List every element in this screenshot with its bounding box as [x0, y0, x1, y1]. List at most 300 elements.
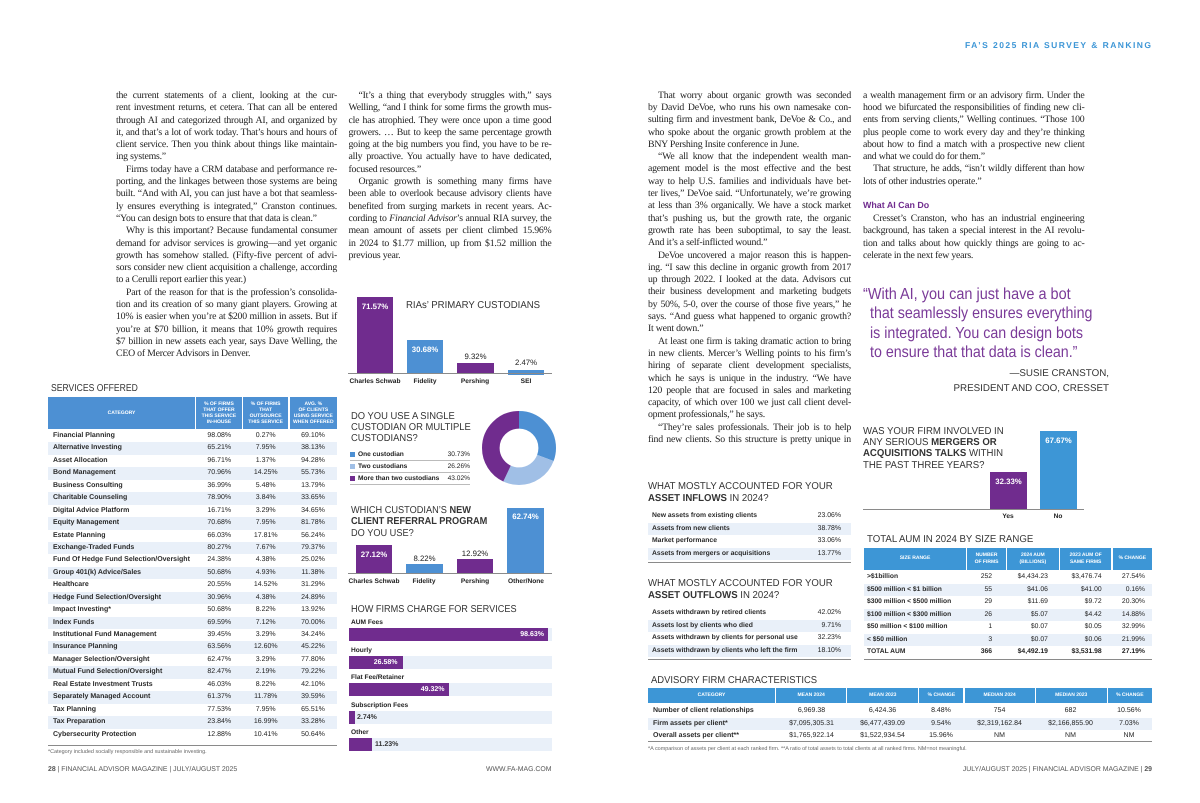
total AUM table rows: $0.05 [1085, 623, 1102, 630]
services table rows: 16.99% [254, 718, 278, 725]
total AUM table header: SAME FIRMS [1070, 558, 1101, 564]
article column 4 top [863, 90, 1085, 187]
article column 4 top: lots of other industries operate.” [863, 176, 981, 187]
article column 1: $7 billion in new assets each year, says Dave Welling, the [116, 336, 337, 347]
total AUM table rows: $3,476.74 [1071, 573, 1102, 580]
services table rows: 69.10% [301, 432, 325, 439]
pull quote attribution [953, 368, 1109, 394]
bar: Fidelity [406, 564, 443, 573]
bar: no [1040, 430, 1077, 509]
total AUM table header: SIZE RANGE [900, 555, 930, 561]
services table rows: 3.84% [256, 494, 276, 501]
article column 2: cording to Financial Advisor’s annual RIA survey, the [348, 213, 552, 224]
services table rows: 3.29% [256, 656, 276, 663]
article column 4 bottom: celerate in the next few years. [863, 250, 973, 261]
total AUM table rows: $100 million < $300 million [867, 611, 951, 618]
services table rows: 24.89% [301, 594, 325, 601]
services table rows: 14.52% [254, 581, 278, 588]
total AUM table rows: $11.69 [1028, 598, 1048, 605]
services table rows: 30.96% [207, 594, 231, 601]
services table rows: 36.99% [207, 482, 231, 489]
heading: referral program [351, 505, 487, 539]
article column 3: ing. “I saw this decline in organic growth from 2017 [648, 262, 851, 273]
article column 3: agement model is the most effective and the best [648, 163, 851, 174]
services table rows: 0.27% [256, 432, 276, 439]
services table header: OUTSOURCE [250, 413, 282, 419]
services table rows: 3.29% [256, 631, 276, 638]
article column 3: BNY Pershing Insite conference in June. [648, 139, 799, 150]
table: asset outflows: Assets lost by clients who died [652, 622, 753, 628]
heading: single or multiple [351, 411, 471, 444]
advisory table rows: 7.03% [1119, 720, 1139, 727]
heading: mergers and acquisitions: ACQUISITIONS TALKS WITHIN [863, 448, 1003, 459]
total AUM table rows: 27.54% [1122, 573, 1145, 580]
article column 1: ly ensures everything is integrated,” Cranston continues. [116, 201, 337, 212]
article column 1: client service. Then you think about things like maintain- [116, 139, 337, 150]
services table rows: 50.68% [207, 606, 231, 613]
page footer right: JULY/AUGUST 2025 | FINANCIAL ADVISOR MAGAZINE | 29 [963, 766, 1152, 773]
article column 1: “You can design bots to ensure that that data is clean.” [116, 213, 317, 224]
heading: mergers and acquisitions: ANY SERIOUS MERGERS OR [863, 437, 997, 448]
advisory table rows: 6,969.38 [798, 707, 825, 714]
article column 1: through AI and categorized through AI, and organized by [116, 115, 337, 126]
total AUM table rows: $9.72 [1085, 598, 1102, 605]
label: other: Other [351, 729, 369, 736]
heading: asset inflows [648, 481, 833, 504]
services table rows: 5.48% [256, 482, 276, 489]
legend: more than two: More than two custodians [358, 474, 439, 482]
total AUM table rows: $0.06 [1085, 636, 1102, 643]
services table rows: Institutional Fund Management [53, 631, 156, 638]
chart: RIAs primary custodians: 2.47% [515, 358, 537, 367]
services table rows: 50.68% [207, 569, 231, 576]
article column 2: Welling, “and I think for some firms the growth mus- [348, 102, 552, 113]
services table rows: 65.51% [301, 706, 325, 713]
article column 1: demand for advisor services is growing—and yet organic [116, 238, 337, 249]
article column 2: focused resources.” [348, 164, 421, 175]
article column 3: who spoke about the organic growth problem at the [648, 127, 851, 138]
article column 3: by 50%, 5-0, over the course of those five years,” he [648, 299, 851, 310]
advisory table header: MEAN 2023 [869, 692, 896, 698]
total AUM table rows: $5.07 [1031, 611, 1048, 618]
total AUM table rows: $4,434.23 [1018, 573, 1048, 580]
services table rows: 20.55% [207, 581, 231, 588]
article column 1: built. “And with AI, you can just have a bot that seamless- [116, 188, 337, 199]
services table rows: Digital Advice Platform [53, 507, 129, 514]
services table rows: 11.78% [254, 693, 277, 700]
article column 3: find new clients. So this structure is pretty unique in [648, 434, 851, 445]
services table header: % OF FIRMS [204, 401, 234, 407]
article column 1: CEO of Mercer Advisors in Denver. [116, 348, 250, 359]
article column 4 top: and what we could do for them.” [863, 151, 985, 162]
advisory table rows: Firm assets per client* [653, 720, 728, 727]
services table rows: Mutual Fund Selection/Oversight [53, 668, 162, 675]
advisory table rows: 8.48% [931, 707, 951, 714]
heading: services offered: SERVICES OFFERED [51, 383, 138, 394]
article column 2: Organic growth is something many firms have [358, 176, 552, 187]
total AUM table rows: >$1billion [867, 573, 898, 580]
services table rows: 66.03% [207, 532, 231, 538]
services table rows: 78.90% [207, 494, 231, 501]
heading: single or multiple: CUSTODIANS? [351, 433, 418, 444]
services table rows: 46.03% [207, 681, 231, 688]
total AUM table rows: 366 [981, 648, 992, 655]
table: asset outflows: Assets withdrawn by clients who left the firm [652, 646, 797, 654]
label: flat fee: Flat Fee/Retainer [351, 674, 404, 681]
advisory table rows: $6,477,439.09 [860, 720, 905, 727]
article column 3: says. “And guess what happened to organic growth? [648, 311, 851, 322]
total AUM table rows: 14.88% [1122, 611, 1145, 618]
total AUM table rows: 20.30% [1122, 598, 1145, 605]
panel: single or multiple custodians [350, 411, 471, 485]
article column 3: It went down.” [648, 323, 703, 334]
pull quote: is integrated. You can design bots [870, 325, 1083, 342]
services table rows: 24.38% [207, 556, 231, 563]
chart: referral program [348, 505, 552, 585]
advisory table rows: 10.56% [1117, 707, 1141, 714]
page footer left: 28 | FINANCIAL ADVISOR MAGAZINE | JULY/AUGUST 2025 [48, 766, 237, 773]
advisory table rows: $2,166,855.90 [1048, 720, 1093, 727]
heading: referral program: CLIENT REFERRAL PROGRAM [351, 516, 487, 527]
advisory table rows: 9.54% [931, 720, 951, 727]
advisory table rows: 754 [994, 707, 1005, 714]
total AUM table header [864, 548, 1152, 570]
table: asset inflows: 38.78% [818, 525, 841, 532]
label: hourly: Hourly [351, 647, 372, 654]
bar: Other/None [507, 508, 544, 573]
total AUM table rows: $0.07 [1031, 636, 1048, 643]
services table rows: 61.37% [207, 693, 231, 700]
article column 3: “They’re sales professionals. Their job is to help [658, 422, 851, 433]
advisory table rows: $7,095,305.31 [789, 720, 834, 727]
article column 3: which he says is unique in the industry. “We have [648, 373, 851, 384]
services table header: IN-HOUSE [207, 419, 231, 425]
bar: Charles Schwab [356, 545, 392, 573]
services table rows: 12.60% [254, 643, 278, 650]
services table header: AVG. % [304, 401, 322, 407]
total AUM table rows: $500 million < $1 billion [867, 586, 942, 593]
heading: referral program: DO YOU USE? [351, 528, 414, 539]
bar: Charles Schwab: 27.12% [361, 550, 387, 559]
bar: no: 67.67% [1045, 436, 1072, 444]
services table rows: 45.22% [301, 643, 325, 650]
heading: single or multiple: CUSTODIAN OR MULTIPLE [351, 422, 471, 433]
bar: Fidelity: 30.68% [412, 345, 438, 354]
article column 3: opment professionals,” he says. [648, 409, 765, 420]
services table rows: 96.71% [207, 457, 231, 464]
chart: mergers and acquisitions: No [1054, 513, 1062, 520]
total AUM table rows: TOTAL AUM [867, 648, 905, 655]
services table rows: Exchange-Traded Funds [53, 544, 134, 551]
article column 2: going at the big numbers you find, you have to be re- [348, 139, 552, 150]
table: asset outflows: Assets withdrawn by retired clients [652, 609, 766, 616]
article column 1: Why is this important? Because fundamental consumer [126, 225, 337, 236]
services table rows: 25.02% [301, 556, 325, 563]
services table rows: 70.96% [207, 469, 231, 476]
services table rows: 81.78% [301, 519, 325, 526]
bar: Charles Schwab: 71.57% [362, 302, 388, 311]
total AUM table header: 2024 AUM [1021, 552, 1045, 558]
chart: RIAs primary custodians: Pershing [461, 378, 489, 385]
article column 2: previous year. [348, 250, 400, 261]
article column 3: “We all know that the independent wealth man- [658, 151, 851, 162]
pull quote attribution: PRESIDENT AND COO, CRESSET [953, 383, 1109, 394]
article column 3: sulting firm and investment bank, DeVoe & Co., and [648, 114, 851, 125]
services table rows: Asset Allocation [53, 457, 108, 464]
heading: mergers and acquisitions [863, 426, 1004, 471]
heading: mergers and acquisitions: WAS YOUR FIRM INVOLVED IN [863, 426, 1004, 437]
services table rows: Equity Management [53, 519, 119, 526]
chart: RIAs primary custodians: Charles Schwab [350, 378, 400, 385]
advisory table rows: Overall assets per client** [653, 732, 739, 739]
advisory table header: MEAN 2024 [798, 692, 825, 698]
services table header: WHEN OFFERED [293, 419, 334, 425]
advisory table rows: NM [1065, 732, 1076, 739]
services table header: USING SERVICE [294, 413, 333, 419]
article column 4 top: a wealth management firm or an advisory firm. Under the [863, 90, 1084, 101]
article column 3: ter lives,” DeVoe said. “Unfortunately, we’re growing [648, 188, 851, 199]
total AUM table rows: 252 [981, 573, 992, 580]
heading: asset outflows: ASSET OUTFLOWS IN 2024? [648, 590, 779, 601]
services table rows: 33.65% [301, 494, 325, 501]
article column 1: porting, and the linkages between those systems are being [116, 176, 337, 187]
services table rows: 4.93% [256, 569, 276, 576]
chart: referral program: Other/None [508, 578, 544, 585]
article column 2 [348, 90, 552, 261]
heading: single or multiple: DO YOU USE A SINGLE [351, 411, 455, 422]
services table header [48, 397, 337, 429]
bar: yes: 32.33% [995, 477, 1022, 486]
services table rows: 2.19% [256, 668, 276, 675]
chart: mergers and acquisitions: Yes [1002, 513, 1014, 520]
services table rows: 79.37% [301, 544, 325, 551]
table: asset outflows [648, 609, 851, 657]
article column 1: growth has somehow stalled. (Fifty-five percent of advi- [116, 250, 337, 261]
total AUM table rows: $300 million < $500 million [867, 598, 951, 605]
subheading: What AI Can Do: What AI Can Do [863, 200, 929, 210]
services table rows: Real Estate Investment Trusts [53, 681, 153, 688]
bar: AUM fees [349, 628, 552, 641]
services table rows: 4.38% [256, 594, 276, 601]
article column 2: cle has atrophied. They were once upon a time good [348, 115, 552, 126]
heading: referral program: WHICH CUSTODIAN’S NEW [351, 505, 471, 516]
services table rows: 23.84% [207, 718, 231, 725]
table: asset outflows: Assets withdrawn by clients for personal use [652, 634, 798, 641]
label: subscription: Subscription Fees [351, 702, 408, 709]
services table rows: 39.45% [207, 631, 231, 638]
article column 2: ally proactive. You actually have to have dedicated, [348, 151, 552, 162]
article column 2: growers. … But to keep the same percentage growth [348, 127, 552, 138]
running head: FA’S 2025 RIA SURVEY & RANKING [965, 40, 1152, 50]
total AUM table rows: 21.99% [1122, 636, 1145, 643]
article column 1: ing systems.” [116, 151, 166, 162]
bar: Pershing [457, 559, 493, 573]
bar: yes [990, 472, 1027, 509]
total AUM table rows: < $50 million [867, 636, 907, 643]
advisory table rows [648, 706, 1152, 739]
article column 4 top: hood we bifurcated the responsibilities of finding new cli- [863, 102, 1084, 113]
advisory table rows: NM [994, 732, 1005, 739]
services table rows: 82.47% [207, 668, 231, 675]
article column 2: benefited from surging markets in recent years. Ac- [348, 201, 552, 212]
services table rows: 70.68% [207, 519, 231, 526]
legend: one custodian: One custodian [358, 450, 404, 458]
total AUM table rows: $0.07 [1031, 623, 1048, 630]
advisory table rows: $1,522,934.54 [860, 732, 905, 739]
article column 3: up through 2022. I looked at the data. Advisors cut [648, 274, 851, 285]
donut chart [482, 411, 556, 485]
article column 2: in 2024 to $1.77 million, up from $1.52 million the [348, 238, 552, 249]
article column 3: And it’s a self-inflicted wound.” [648, 237, 767, 248]
services table rows: Manager Selection/Oversight [53, 656, 149, 663]
total AUM table rows: $3,531.98 [1071, 648, 1102, 655]
services table rows: 77.80% [301, 656, 325, 663]
heading: asset inflows: WHAT MOSTLY ACCOUNTED FOR YOUR [648, 481, 833, 492]
table: asset inflows: Assets from new clients [652, 525, 730, 532]
heading: asset outflows: WHAT MOSTLY ACCOUNTED FOR YOUR [648, 578, 833, 589]
advisory table rows: $2,319,162.84 [977, 720, 1022, 727]
chart: RIAs primary custodians: 9.32% [464, 352, 487, 360]
services table header: THAT [259, 407, 272, 413]
article column 3: their business development and marketing budgets [648, 286, 851, 297]
article column 1: sors consider new client acquisition a challenge, according [116, 262, 337, 273]
footer url: WWW.FA-MAG.COM [486, 766, 552, 773]
services table rows: 31.29% [301, 581, 325, 588]
services table rows: 70.00% [301, 619, 325, 626]
services table rows: Charitable Counseling [53, 494, 127, 501]
advisory table header: MEDIAN 2024 [983, 692, 1016, 698]
heading: primary custodians: RIAs’ PRIMARY CUSTODIANS [406, 300, 540, 311]
services table rows: Impact Investing* [53, 606, 111, 613]
article column 3: way to help U.S. families and individuals have bet- [648, 176, 851, 187]
chart: RIAs primary custodians: Fidelity [413, 378, 437, 385]
services table rows: 94.28% [301, 457, 325, 464]
bar: flat fee: 49.32% [421, 686, 444, 693]
total AUM table rows: 27.19% [1122, 648, 1145, 655]
legend: two custodians: 26.26% [448, 462, 470, 470]
services table rows: Estate Planning [53, 532, 106, 538]
services table header: % OF FIRMS [251, 401, 280, 407]
chart: referral program: 8.22% [413, 554, 436, 563]
services table rows: Bond Management [53, 469, 116, 476]
services table rows: 3.29% [256, 507, 276, 514]
heading: mergers and acquisitions: THE PAST THREE YEARS? [863, 460, 984, 471]
services table rows: Fund Of Hedge Fund Selection/Oversight [53, 556, 190, 563]
total AUM table rows: $4,492.19 [1018, 648, 1048, 655]
services table rows: 8.22% [256, 681, 276, 688]
article column 1: 10% is easier when you’re at $200 million in assets. But if [116, 311, 337, 322]
services table rows: Hedge Fund Selection/Oversight [53, 594, 161, 601]
services table rows: 33.28% [301, 718, 325, 725]
article column 1: Firms today have a CRM database and performance re- [126, 164, 337, 175]
article column 4 bottom [863, 213, 1084, 261]
services table rows: Tax Preparation [53, 718, 105, 725]
services table rows: 69.59% [207, 619, 231, 626]
total AUM table header: (BILLIONS) [1020, 558, 1046, 564]
services table rows: 62.47% [207, 656, 231, 663]
table: asset outflows: 32.23% [818, 634, 841, 641]
total AUM table rows: 32.99% [1122, 623, 1145, 630]
bar: hourly: 26.58% [374, 659, 398, 666]
article column 3: capacity, of which over 100 we just call client devel- [648, 397, 851, 408]
services table rows: 34.24% [301, 631, 325, 638]
table: asset inflows: 13.77% [818, 550, 841, 557]
pull quote: “With AI, you can just have a bot [863, 286, 1071, 302]
article column 3: That worry about organic growth was seconded [658, 90, 851, 101]
article column 3: DeVoe uncovered a major reason this is happen- [658, 250, 851, 261]
bar: SEI [508, 370, 544, 375]
advisory table rows: $1,765,922.14 [789, 732, 834, 739]
article column 2: “It’s a thing that everybody struggles with,” says [358, 90, 552, 101]
table: asset outflows: 9.71% [821, 622, 841, 628]
services table rows: 38.13% [301, 444, 325, 451]
article column 3: hiring of separate client development specialists, [648, 360, 851, 371]
bar: Fidelity [407, 340, 443, 373]
services table rows: 55.73% [301, 469, 325, 476]
article column 2: mean amount of assets per client climbed 15.96% [348, 225, 552, 236]
table: asset inflows: 23.06% [818, 512, 841, 519]
pull quote: to ensure that that data is clean.” [870, 344, 1077, 361]
bar: flat fee [349, 683, 552, 696]
services table header: THAT OFFER [203, 407, 235, 413]
article column 3: at less than 3% organically. We have a stock market [648, 200, 851, 211]
heading: how firms charge: HOW FIRMS CHARGE FOR SERVICES [351, 604, 517, 615]
services table header: THIS SERVICE [248, 419, 283, 425]
pull quote: that seamlessly ensures everything [870, 305, 1092, 322]
article column 4 top: ents from serving clients,” Welling continues. “Those 100 [863, 114, 1084, 125]
bar: subscription: 2.74% [357, 714, 377, 720]
services table rows: 77.53% [207, 706, 231, 713]
article column 1: tion and its creation of so many giant players. Growing at [116, 299, 337, 310]
chart: referral program: Charles Schwab [349, 578, 399, 585]
article column 4 top: plus people come to work every day and they’re thinking [863, 127, 1084, 138]
article column 1: to a Cerulli report earlier this year.) [116, 274, 246, 285]
total AUM table rows [864, 573, 1152, 655]
services table rows: 79.22% [301, 668, 325, 675]
advisory table rows: NM [1124, 732, 1134, 739]
legend: one custodian: 30.73% [448, 450, 470, 458]
total AUM table header: NUMBER [976, 552, 998, 558]
advisory table rows: 15.96% [929, 732, 953, 739]
article column 4 bottom: tion and talks about how quickly things are going to ac- [863, 238, 1084, 249]
services table rows: Business Consulting [53, 482, 123, 489]
article column 3: 120 people that are focused in sales and marketing [648, 385, 851, 396]
article column 1: the current statements of a client, looking at the cur- [116, 90, 337, 101]
services table rows: 13.92% [301, 606, 325, 613]
services table rows: 10.41% [254, 730, 278, 738]
total AUM table rows: $41.06 [1027, 586, 1048, 593]
bar: Other/None: 62.74% [512, 512, 539, 520]
services table header: OF CLIENTS [298, 407, 328, 413]
advisory table header: CATEGORY [698, 692, 725, 698]
article column 3: in new clients. Mercer’s Welling points to his firm’s [648, 348, 851, 359]
total AUM table rows: 29 [985, 598, 992, 605]
chart: referral program: 12.92% [462, 548, 488, 558]
total AUM table rows: $50 million < $100 million [867, 623, 947, 630]
chart: referral program: Fidelity [412, 578, 436, 585]
pull quote [863, 286, 1092, 361]
heading: total AUM: TOTAL AUM IN 2024 BY SIZE RANGE [867, 534, 1033, 545]
services table rows: Healthcare [53, 581, 89, 588]
article column 3: by David DeVoe, who runs his own namesake con- [648, 102, 851, 113]
services table rows: 17.81% [254, 532, 278, 538]
legend: more than two [350, 472, 470, 484]
article column 4 top: That structure, he adds, “isn’t wildly different than how [873, 163, 1084, 174]
bar: Pershing [457, 363, 494, 373]
services table rows: Separately Managed Account [53, 693, 150, 700]
total AUM table rows: 0.16% [1126, 586, 1145, 593]
services table rows: Group 401(k) Advice/Sales [53, 569, 141, 576]
